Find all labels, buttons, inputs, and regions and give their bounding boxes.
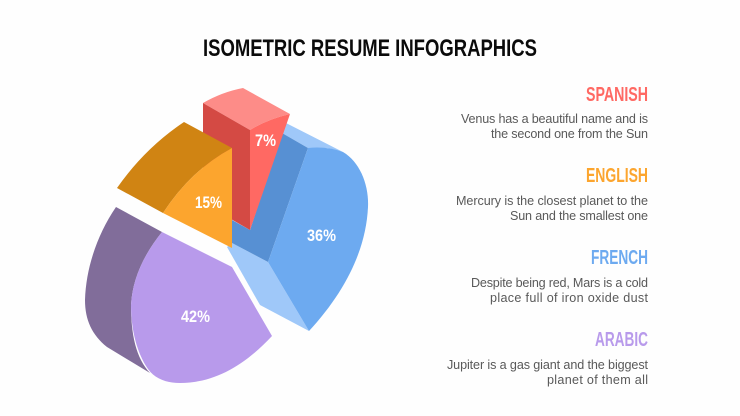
slice: Arabic 42% xyxy=(85,207,272,383)
legend: English: Sun and the smallest one xyxy=(510,209,648,223)
legend: French xyxy=(471,247,648,305)
legend: Arabic: ARABIC xyxy=(595,329,648,351)
legend: English xyxy=(456,165,648,223)
slice: English 15% xyxy=(117,122,232,248)
legend: Spanish: the second one from the Sun xyxy=(491,127,648,141)
legend: Spanish: Venus has a beautiful name and is xyxy=(461,112,648,126)
slice: Spanish 7% xyxy=(203,88,290,230)
slice: Arabic 42%: 42% xyxy=(181,307,210,326)
legend: French: FRENCH xyxy=(591,247,648,269)
legend: Spanish: SPANISH xyxy=(586,84,648,106)
legend: English: ENGLISH xyxy=(586,165,648,187)
legend: English: Mercury is the closest planet to the xyxy=(456,194,648,208)
slice: Spanish 7%: 7% xyxy=(255,131,276,150)
legend: Spanish xyxy=(461,84,648,141)
legend: French: place full of iron oxide dust xyxy=(490,291,648,305)
legend: Arabic xyxy=(447,329,648,387)
title: ISOMETRIC RESUME INFOGRAPHICS xyxy=(203,35,537,62)
legend: Arabic: planet of them all xyxy=(547,373,648,387)
isometric pie chart xyxy=(85,88,368,383)
legend: Arabic: Jupiter is a gas giant and the biggest xyxy=(447,358,648,372)
slice: French 36%: 36% xyxy=(307,226,336,245)
legend: French: Despite being red, Mars is a cold xyxy=(471,276,648,290)
slice: French 36% xyxy=(227,122,368,331)
slice: English 15%: 15% xyxy=(195,193,222,212)
